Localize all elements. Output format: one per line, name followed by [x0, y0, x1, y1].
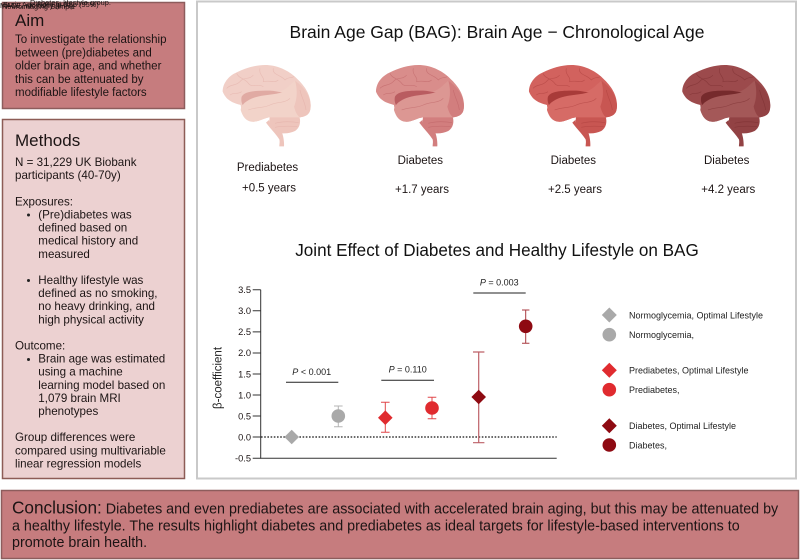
outcome list: Outcome: — [15, 340, 65, 352]
p value: normoglycemia — [286, 367, 338, 382]
stray overlapping caption text: Brain Age Normal Gap (95%) — [3, 0, 99, 9]
aim text: older brain age, and whether — [15, 61, 162, 73]
y axis ticks: -0.5 — [235, 454, 251, 464]
label: diabetes +4.2: +4.2 years — [701, 184, 756, 196]
label: diabetes +2.5: +2.5 years — [548, 184, 602, 196]
y axis ticks: 2.0 — [238, 348, 251, 358]
exposures list: Healthy lifestyle was — [38, 274, 144, 287]
aim text: To investigate the relationship — [15, 34, 167, 46]
y axis ticks: 1.5 — [238, 369, 251, 379]
label: diabetes +2.5 — [548, 155, 602, 196]
y axis ticks: 3.0 — [238, 306, 251, 316]
legend: diabetes optimal: Diabetes, Optimal Lifestyle — [629, 421, 736, 431]
legend: prediabetes: Prediabetes, — [629, 385, 680, 395]
exposures list: (Pre)diabetes was — [38, 208, 132, 222]
group comparison text: linear regression models — [15, 457, 142, 470]
p value: prediabetes — [381, 365, 434, 380]
outcome list: Brain age was estimated — [38, 353, 165, 366]
legend: diabetes optimal — [602, 418, 736, 433]
study sample text: participants (40-70y) — [15, 169, 121, 182]
group comparison text: compared using multivariable — [15, 444, 166, 457]
axes — [253, 290, 557, 458]
panel: conclusion — [2, 490, 798, 558]
brain: prediabetes — [223, 65, 311, 146]
series: normoglycemia — [284, 406, 345, 444]
heading: joint effect: Joint Effect of Diabetes and Healthy Lifestyle on BAG — [295, 241, 699, 260]
heading: brain age gap: Brain Age Gap (BAG): Brain Age − Chronological Age — [290, 22, 704, 42]
series: prediabetes — [378, 397, 439, 432]
aim text — [15, 34, 167, 99]
outcome list: phenotypes — [38, 405, 98, 418]
stray overlapping caption text: MACE, mortality (IHR) — [0, 1, 73, 10]
y axis ticks: 1.0 — [238, 390, 251, 400]
label: diabetes +1.7 — [395, 155, 449, 196]
legend: prediabetes optimal: Prediabetes, Optimal Lifestyle — [629, 366, 749, 376]
panel: methods — [2, 120, 184, 478]
legend: diabetes: Diabetes, — [629, 440, 667, 450]
label: prediabetes +0.5: +0.5 years — [242, 182, 296, 194]
legend: diabetes — [602, 438, 667, 452]
label: diabetes +4.2 — [701, 155, 756, 196]
exposures list: high physical activity — [38, 313, 144, 326]
panel: aim — [2, 2, 184, 108]
conclusion text: Conclusion: Diabetes and even prediabetes are associated with accelerated brain aging, but this may be attenuated by — [12, 498, 779, 518]
y axis label: β-coefficient — [212, 346, 224, 409]
aim text: this can be attenuated by — [15, 74, 144, 86]
legend: prediabetes — [602, 383, 680, 397]
aim text: between (pre)diabetes and — [15, 47, 152, 59]
study sample text: N = 31,229 UK Biobank — [15, 156, 137, 169]
outcome list: using a machine — [38, 366, 123, 379]
exposures list: defined based on — [38, 222, 127, 235]
y axis ticks — [235, 285, 251, 464]
label: diabetes +1.7: Diabetes — [398, 155, 443, 167]
label: prediabetes +0.5: Prediabetes — [237, 162, 298, 174]
legend: normoglycemia optimal: Normoglycemia, Optimal Lifestyle — [629, 310, 763, 320]
heading: aim: Aim — [15, 11, 44, 30]
legend: normoglycemia: Normoglycemia, — [629, 330, 694, 340]
p value: diabetes: P = 0.003 — [480, 278, 519, 288]
y axis ticks: 3.5 — [238, 285, 251, 295]
exposures list: measured — [38, 248, 90, 261]
conclusion text — [12, 498, 779, 551]
study sample text — [15, 156, 137, 182]
legend: normoglycemia — [602, 328, 694, 342]
p value: diabetes — [473, 278, 526, 293]
y axis ticks: 2.5 — [238, 327, 251, 337]
exposures list: Exposures: — [15, 195, 73, 208]
exposures list: medical history and — [38, 235, 138, 248]
zero reference line — [261, 436, 557, 438]
label: prediabetes +0.5 — [237, 162, 298, 194]
outcome list: 1,079 brain MRI — [38, 392, 121, 405]
aim text: modifiable lifestyle factors — [15, 87, 147, 99]
legend — [602, 308, 763, 452]
panel: results — [197, 2, 796, 478]
legend: normoglycemia optimal — [602, 308, 763, 322]
outcome list — [15, 340, 165, 418]
conclusion text: promote brain health. — [12, 535, 147, 551]
conclusion text: a healthy lifestyle. The results highlight diabetes and prediabetes as ideal targets for lifestyle-based interventions to — [12, 518, 740, 534]
y axis ticks: 0.5 — [238, 411, 251, 421]
heading: methods: Methods — [15, 131, 80, 150]
brain: diabetes 1.7 — [376, 65, 464, 146]
outcome list: learning model based on — [38, 379, 165, 392]
label: diabetes +1.7: +1.7 years — [395, 184, 449, 196]
legend: prediabetes optimal — [602, 363, 749, 378]
series: diabetes — [471, 310, 532, 443]
group comparison text — [15, 431, 166, 470]
label: diabetes +2.5: Diabetes — [551, 155, 596, 167]
exposures list: defined as no smoking, — [38, 287, 158, 300]
exposures list — [15, 195, 158, 326]
chart: beta coefficient by group — [212, 278, 557, 464]
group comparison text: Group differences were — [15, 431, 135, 444]
brain: diabetes 4.2 — [682, 65, 770, 146]
y axis ticks: 0.0 — [238, 432, 251, 442]
p value: normoglycemia: P < 0.001 — [292, 367, 331, 377]
label: diabetes +4.2: Diabetes — [704, 155, 750, 167]
brain: diabetes 2.5 — [529, 65, 617, 146]
exposures list: no heavy drinking, and — [38, 300, 155, 313]
stray overlapping caption text: Neuroimaging Sample — [2, 2, 75, 11]
p value: prediabetes: P = 0.110 — [389, 365, 427, 375]
